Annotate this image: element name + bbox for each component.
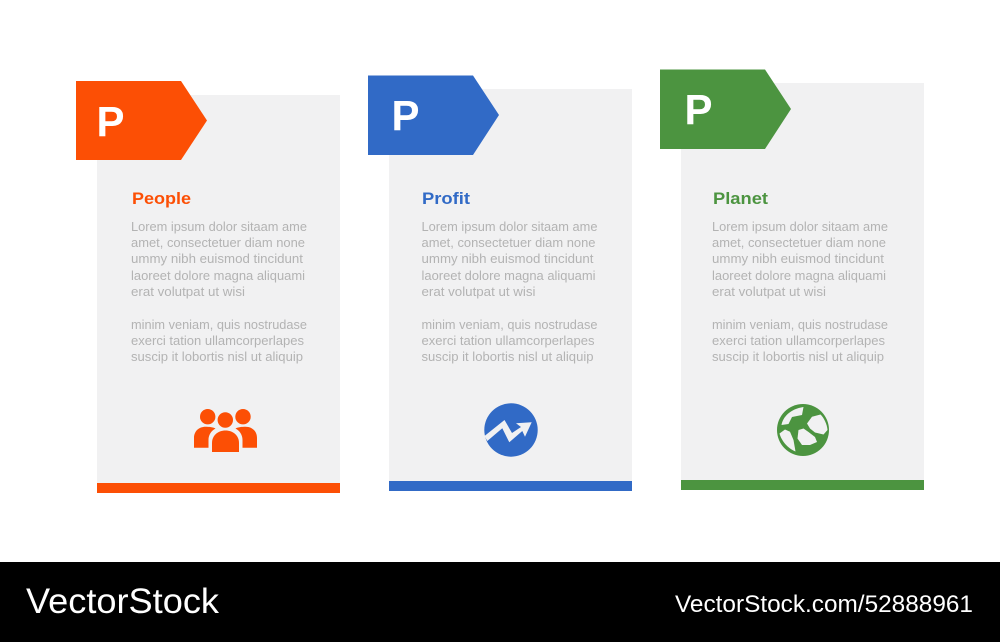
banner background <box>0 562 1000 642</box>
body text: profit: erat volutpat ut wisi <box>422 284 536 299</box>
panel: people <box>76 81 340 493</box>
body text: planet: ummy nibh euismod tincidunt <box>712 251 884 266</box>
body text: profit: ummy nibh euismod tincidunt <box>422 251 594 266</box>
panel: profit <box>368 76 632 491</box>
bottom bar: people <box>97 483 340 493</box>
arrow tag: planet <box>660 70 791 149</box>
heading: planet: Planet <box>713 189 768 208</box>
icon: rising arrow in circle <box>484 403 538 457</box>
body text: people: erat volutpat ut wisi <box>131 284 245 299</box>
tag letter: people: P <box>96 98 124 146</box>
body text: people <box>131 219 307 364</box>
icon: people group <box>194 409 257 452</box>
card background: planet <box>681 83 924 490</box>
body text: planet: amet, consectetuer diam none <box>712 235 886 250</box>
body text: profit: amet, consectetuer diam none <box>422 235 596 250</box>
body text: planet: Lorem ipsum dolor sitaam ame <box>712 219 888 234</box>
body text: profit: minim veniam, quis nostrudase <box>422 317 598 332</box>
body text: profit: Lorem ipsum dolor sitaam ame <box>422 219 598 234</box>
bottom bar: planet <box>681 480 924 490</box>
body text: planet: laoreet dolore magna aliquami <box>712 268 886 283</box>
brand name: VectorStock <box>26 582 220 621</box>
body text: profit: suscip it lobortis nisl ut aliquip <box>422 349 594 364</box>
panel: planet <box>660 70 924 490</box>
arrow tag: profit <box>368 76 499 155</box>
body text: people: amet, consectetuer diam none <box>131 235 305 250</box>
body text: people: Lorem ipsum dolor sitaam ame <box>131 219 307 234</box>
body text: planet <box>712 219 888 364</box>
body text: profit: laoreet dolore magna aliquami <box>422 268 596 283</box>
watermark banner <box>0 562 1000 642</box>
body text: people: ummy nibh euismod tincidunt <box>131 251 303 266</box>
body text: planet: suscip it lobortis nisl ut aliquip <box>712 349 884 364</box>
body text: planet: erat volutpat ut wisi <box>712 284 826 299</box>
tag letter: planet: P <box>684 86 712 134</box>
card background: people <box>97 95 340 493</box>
body text: profit <box>422 219 598 364</box>
body text: people: exerci tation ullamcorperlapes <box>131 333 304 348</box>
stock url: VectorStock.com/52888961 <box>675 591 973 618</box>
heading: people: People <box>132 189 191 208</box>
body text: profit: exerci tation ullamcorperlapes <box>422 333 595 348</box>
tag letter: profit: P <box>392 92 420 140</box>
body text: people: laoreet dolore magna aliquami <box>131 268 305 283</box>
body text: people: suscip it lobortis nisl ut aliquip <box>131 349 303 364</box>
bottom bar: profit <box>389 481 632 491</box>
body text: planet: exerci tation ullamcorperlapes <box>712 333 885 348</box>
card background: profit <box>389 89 632 491</box>
icon: globe <box>777 404 829 456</box>
heading: profit: Profit <box>422 189 470 208</box>
body text: planet: minim veniam, quis nostrudase <box>712 317 888 332</box>
arrow tag: people <box>76 81 207 160</box>
body text: people: minim veniam, quis nostrudase <box>131 317 307 332</box>
